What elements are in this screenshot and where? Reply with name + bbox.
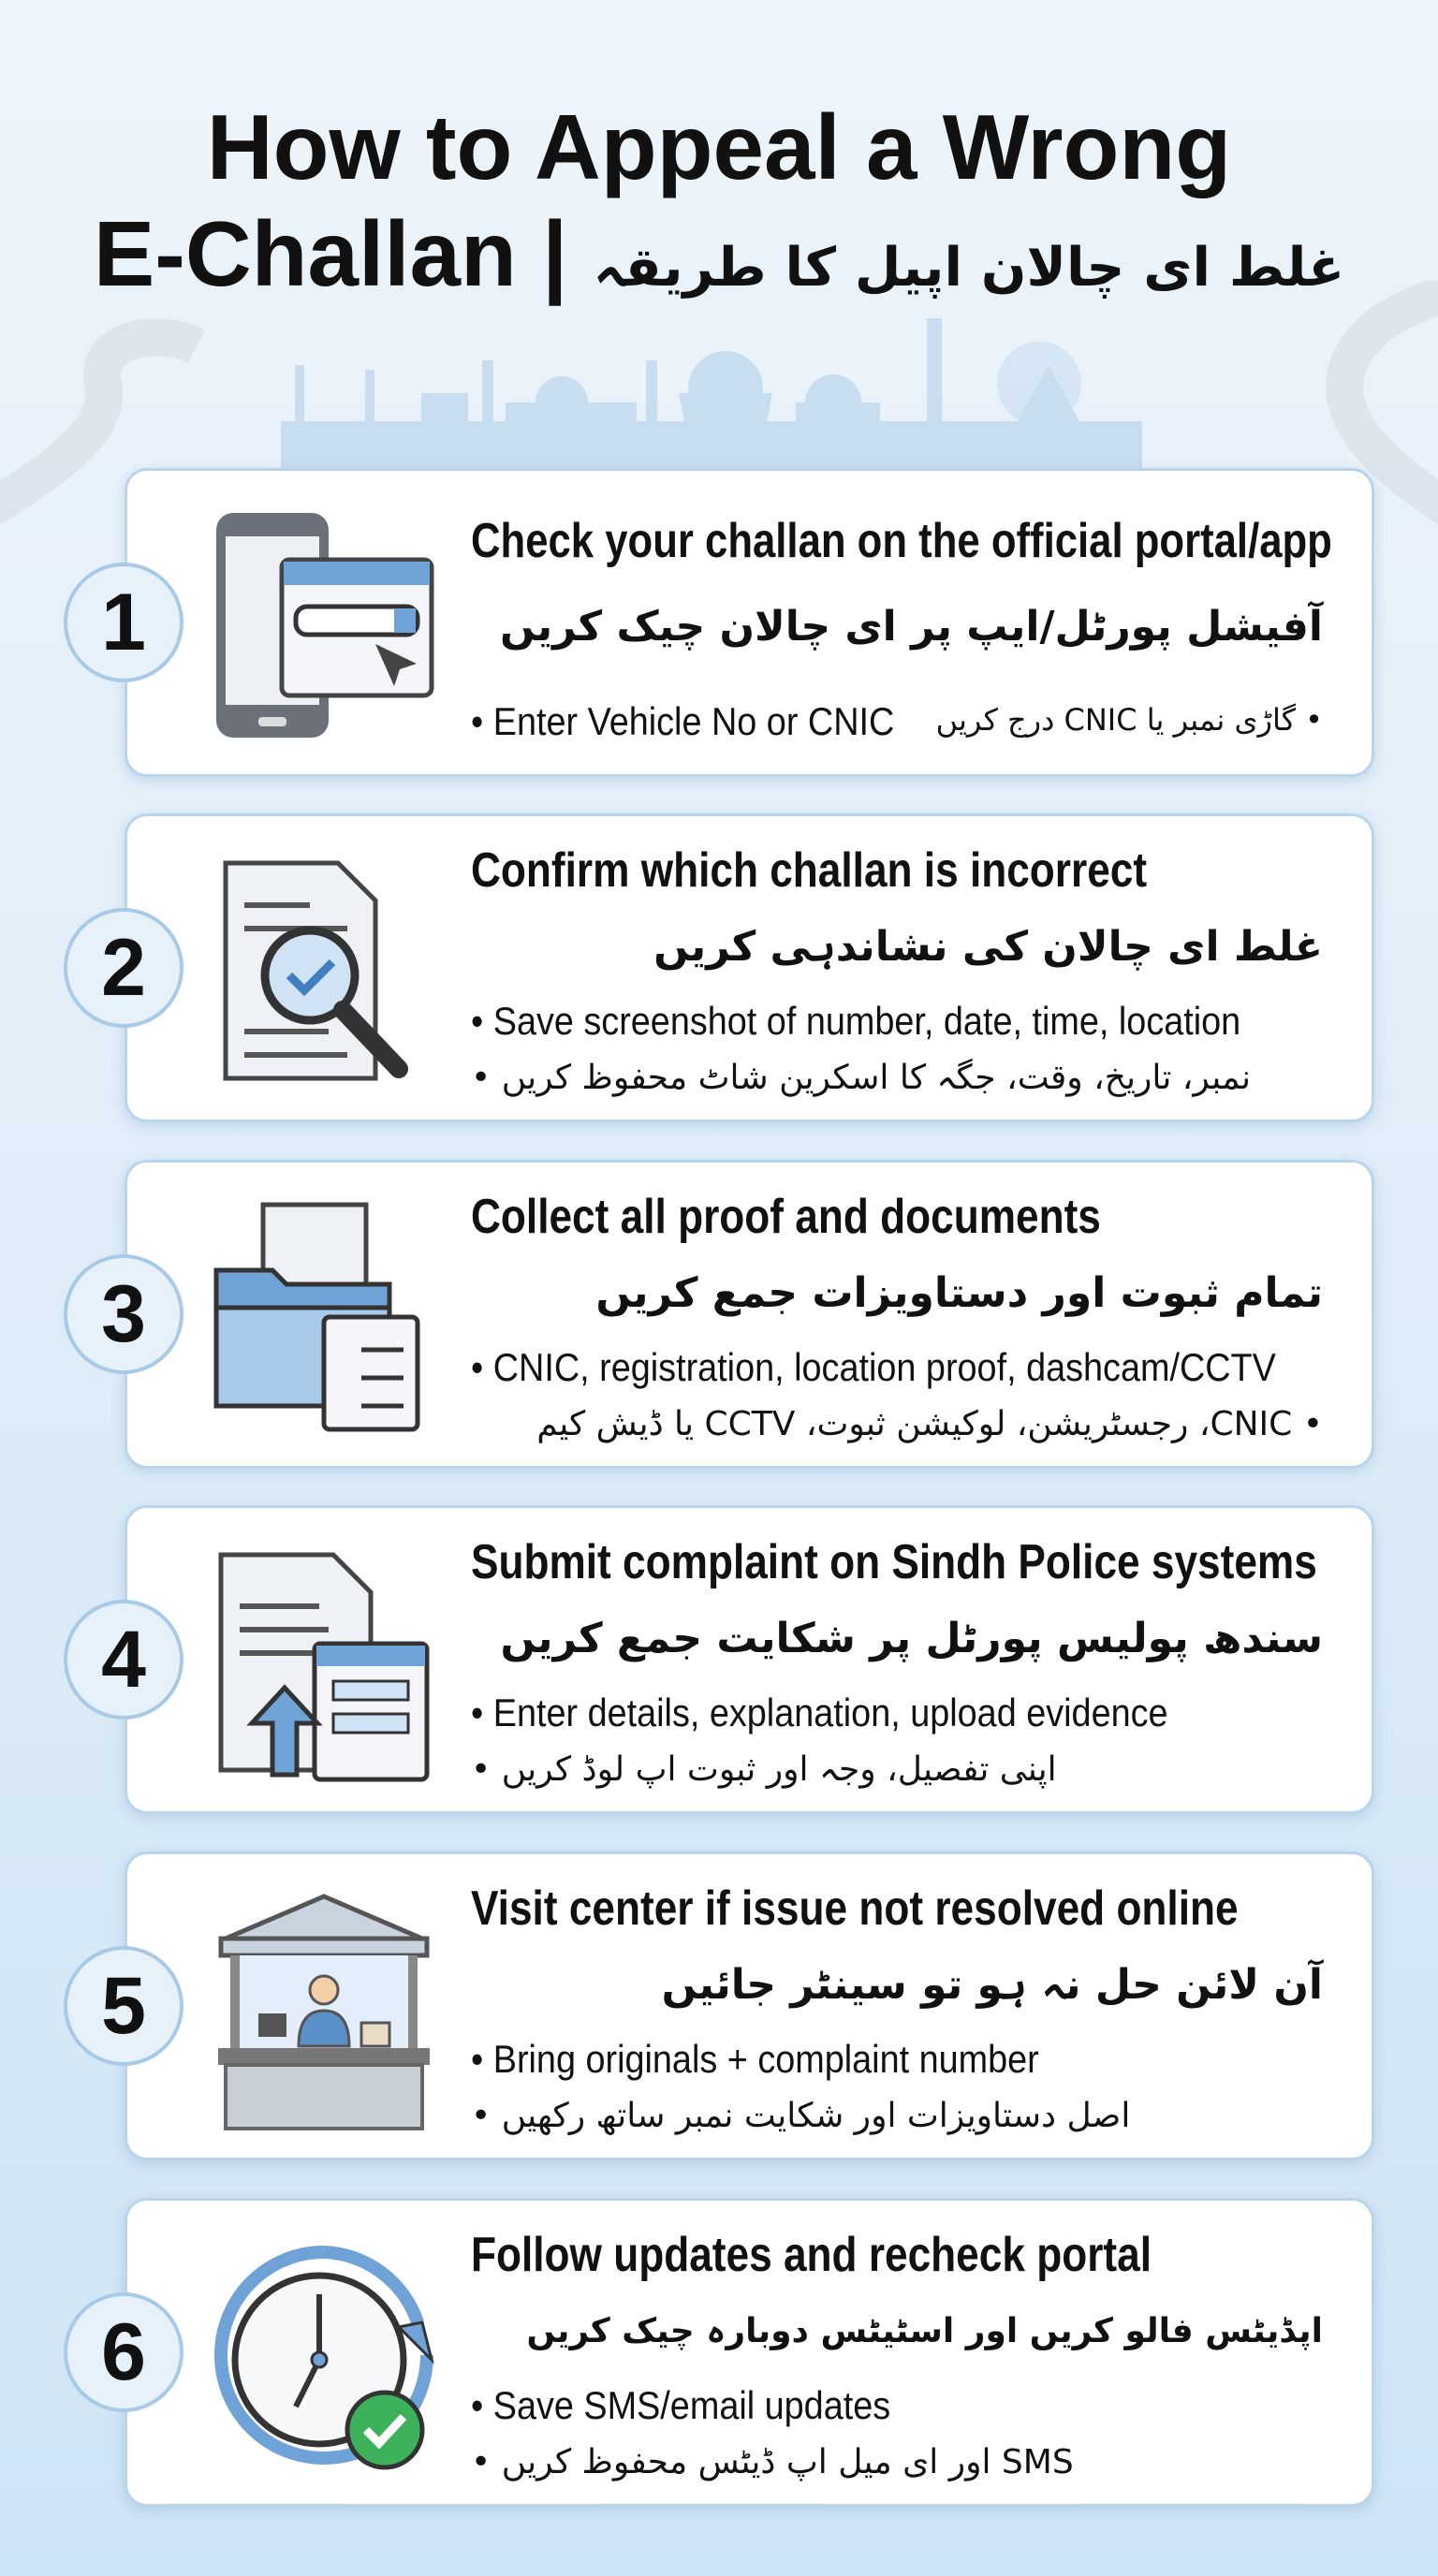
heading: Visit center if issue not resolved online — [471, 1881, 1239, 1936]
number 6 — [64, 2292, 183, 2412]
icon: folder with checklist — [213, 1202, 419, 1432]
title: How to Appeal a Wrong — [207, 95, 1231, 198]
panel: step 3 — [125, 1160, 1374, 1469]
bullets: • CNIC, registration, location proof, dashcam/CCTV — [471, 1345, 1276, 1389]
panel: step 5: • — [471, 2097, 491, 2135]
panel: step 2: • — [471, 1059, 491, 1097]
heading: Submit complaint on Sindh Police systems — [471, 1535, 1317, 1589]
number 2: 2 — [101, 923, 146, 1013]
panel: step 6 — [125, 2198, 1374, 2507]
icon: document with magnifier — [223, 861, 408, 1080]
panel: step 6: SMS اور ای میل اپ ڈیٹس محفوظ کریں — [502, 2443, 1074, 2481]
icon: phone with browser — [216, 513, 434, 738]
number 1 — [64, 563, 183, 682]
number 4 — [64, 1600, 183, 1720]
icon: upload form — [219, 1552, 429, 1782]
panel: step 4: اپنی تفصیل، وجہ اور ثبوت اپ لوڈ کریں — [502, 1750, 1057, 1789]
bullets: • Save screenshot of number, date, time, location — [471, 999, 1240, 1043]
panel: step 5 — [125, 1852, 1374, 2160]
number 4: 4 — [101, 1615, 146, 1705]
number 3 — [64, 1254, 183, 1374]
heading: Collect all proof and documents — [471, 1190, 1101, 1244]
panel: step 2: نمبر، تاریخ، وقت، جگہ کا اسکرین شاٹ محفوظ کریں — [502, 1059, 1251, 1097]
panel: step 6: • — [471, 2443, 491, 2481]
number 5 — [64, 1946, 183, 2066]
urdu heading: آفیشل پورٹل/ایپ پر ای چالان چیک کریں — [500, 603, 1323, 651]
panel: step 1 — [125, 468, 1374, 777]
panel: step 5: اصل دستاویزات اور شکایت نمبر ساتھ رکھیں — [502, 2097, 1130, 2135]
heading: Confirm which challan is incorrect — [471, 843, 1147, 898]
panel: step 4: • — [471, 1750, 491, 1789]
panel: step 3: • CNIC، رجسٹریشن، لوکیشن ثبوت، CCTV یا ڈیش کیم — [536, 1405, 1323, 1443]
number 5: 5 — [101, 1961, 146, 2051]
number 3: 3 — [101, 1269, 146, 1359]
number 1: 1 — [101, 578, 146, 667]
bullets: • Save SMS/email updates — [471, 2383, 890, 2427]
icon: clock with check — [214, 2246, 434, 2469]
urdu heading: آن لائن حل نہ ہو تو سینٹر جائیں — [662, 1961, 1323, 2009]
panel: step 2 — [125, 813, 1374, 1122]
urdu heading: سندھ پولیس پورٹل پر شکایت جمع کریں — [500, 1615, 1323, 1662]
urdu heading: تمام ثبوت اور دستاویزات جمع کریں — [595, 1269, 1323, 1317]
icon: service booth — [218, 1894, 430, 2130]
bullets: • Enter details, explanation, upload evidence — [471, 1690, 1168, 1734]
background skyline and roads — [0, 281, 1438, 524]
title line 2: E-Challan | غلط ای چالان اپیل کا طریقہ — [94, 202, 1344, 305]
heading: Check your challan on the official portal/app — [471, 514, 1332, 568]
heading: Follow updates and recheck portal — [471, 2228, 1152, 2282]
bullets: • Enter Vehicle No or CNIC — [471, 699, 894, 743]
bullets: • Bring originals + complaint number — [471, 2037, 1039, 2081]
urdu heading: اپڈیٹس فالو کریں اور اسٹیٹس دوبارہ چیک کریں — [526, 2312, 1323, 2350]
panel: step 1: • گاڑی نمبر یا CNIC درج کریں — [936, 702, 1323, 738]
number 2 — [64, 908, 183, 1028]
urdu heading: غلط ای چالان کی نشاندہی کریں — [653, 923, 1323, 971]
panel: step 4 — [125, 1505, 1374, 1814]
number 6: 6 — [101, 2307, 146, 2397]
